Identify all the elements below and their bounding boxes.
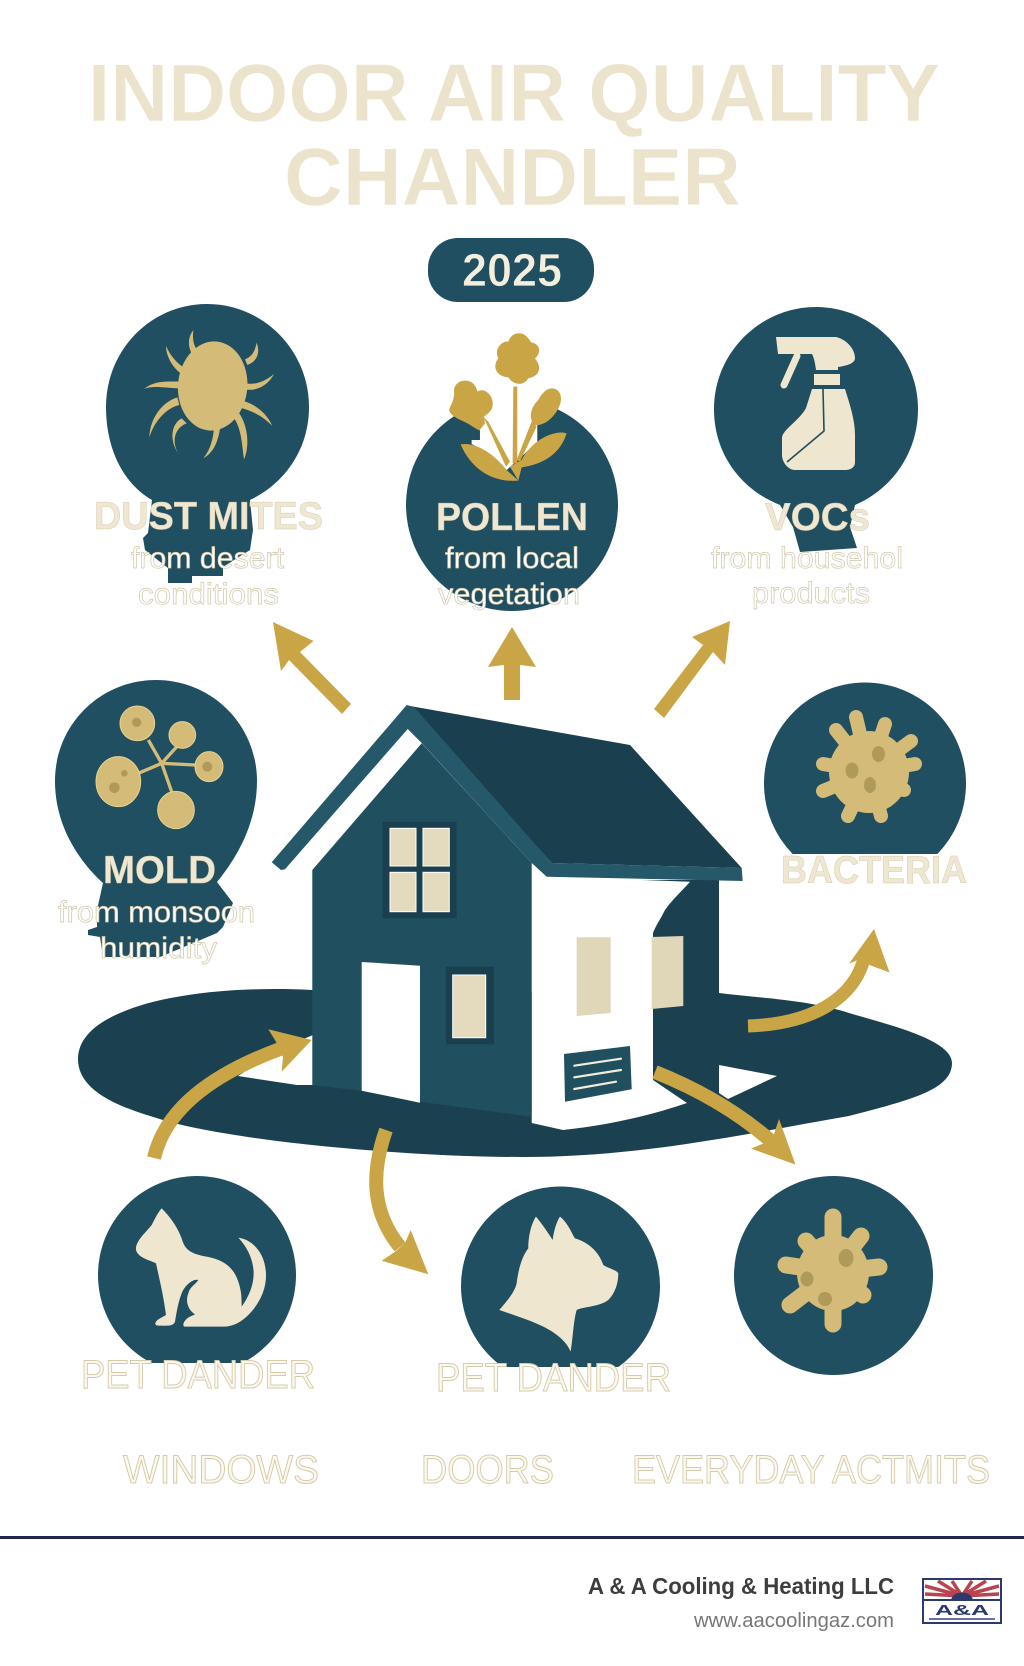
icon: mold spores bbox=[96, 706, 223, 829]
back wall bbox=[640, 880, 719, 1100]
arrow: to bacteria bbox=[748, 929, 890, 1026]
particle backdrop bbox=[734, 1176, 933, 1375]
pollen label: POLLEN bbox=[436, 496, 588, 539]
year badge: 2025 bbox=[462, 244, 562, 296]
arrow: windows air entering bbox=[154, 1029, 312, 1158]
front wall bbox=[312, 743, 532, 1117]
mold source: from monsoon bbox=[58, 896, 255, 929]
panel: bacteria bbox=[764, 682, 967, 892]
ground shadow bbox=[78, 989, 952, 1157]
dust mites source: conditions bbox=[138, 578, 279, 611]
icon: flowers bbox=[449, 333, 567, 481]
title: INDOOR AIR QUALITY bbox=[88, 48, 940, 139]
dust mites source bbox=[131, 542, 285, 611]
bacteria label: BACTERIA bbox=[781, 849, 967, 892]
panel: mold bbox=[55, 680, 257, 965]
panel: pet dander dog bbox=[436, 1186, 671, 1400]
arrow: doors air entering bbox=[376, 1130, 428, 1274]
ground notches bbox=[238, 1035, 777, 1099]
year badge bbox=[428, 238, 594, 302]
icon: company logo: A&A bbox=[935, 1602, 989, 1619]
roof bbox=[410, 706, 742, 868]
lower window bbox=[446, 967, 494, 1044]
pet dander label: PET DANDER bbox=[436, 1356, 671, 1400]
label: everyday activities: EVERYDAY ACTMITS bbox=[632, 1448, 990, 1492]
mold label: MOLD bbox=[103, 849, 216, 892]
footer website: www.aacoolingaz.com bbox=[693, 1610, 894, 1632]
dust mites label: DUST MITES bbox=[94, 495, 323, 538]
pollen source: vegetation bbox=[438, 578, 580, 611]
pollen source bbox=[438, 542, 580, 611]
panel: dust mites bbox=[94, 304, 323, 611]
house on ground bbox=[78, 705, 952, 1157]
title bbox=[88, 48, 940, 223]
VOCs source: from househol bbox=[711, 542, 903, 575]
panel: pet dander cat bbox=[81, 1176, 315, 1397]
footer company name: A & A Cooling & Heating LLC bbox=[588, 1573, 894, 1599]
dust mites source: from desert bbox=[131, 542, 285, 575]
dust mites backdrop bbox=[106, 304, 309, 583]
title: CHANDLER bbox=[284, 132, 741, 223]
side windows bbox=[577, 936, 683, 1016]
panel: everyday particle bbox=[734, 1176, 933, 1375]
roof edge bbox=[272, 705, 743, 881]
arrow: to dust mites bbox=[273, 622, 351, 714]
vent bbox=[564, 1046, 632, 1102]
VOCs source bbox=[711, 542, 903, 610]
icon: cat bbox=[136, 1208, 266, 1327]
icon: dust mite bbox=[144, 330, 274, 459]
label: doors: DOORS bbox=[421, 1448, 554, 1492]
mold source: humidity bbox=[100, 932, 217, 965]
side wall bbox=[532, 863, 690, 1130]
dog backdrop bbox=[461, 1186, 660, 1386]
icon: dog bbox=[499, 1217, 618, 1352]
pollen backdrop bbox=[406, 399, 618, 611]
icon: spray bottle bbox=[776, 337, 855, 470]
pollen source: from local bbox=[445, 542, 579, 575]
label: windows: WINDOWS bbox=[123, 1448, 319, 1492]
VOCs label: VOCs bbox=[765, 496, 870, 539]
cat backdrop bbox=[98, 1176, 296, 1374]
upper window bbox=[383, 822, 457, 918]
icon: company logo bbox=[923, 1579, 1001, 1623]
door bbox=[362, 962, 420, 1103]
footer rule bbox=[0, 1536, 1024, 1539]
panel: VOCs bbox=[711, 307, 918, 610]
VOCs backdrop bbox=[714, 307, 918, 552]
icon: bacteria bbox=[823, 717, 915, 816]
arrow: to pollen bbox=[488, 627, 536, 700]
panel: pollen bbox=[406, 333, 618, 611]
VOCs source: products bbox=[752, 577, 870, 610]
mold backdrop bbox=[55, 680, 257, 957]
pet dander label: PET DANDER bbox=[81, 1353, 315, 1397]
arrow: everyday activities bbox=[655, 1072, 796, 1165]
bacteria backdrop bbox=[764, 682, 966, 854]
icon: particle bbox=[786, 1217, 879, 1324]
mold source bbox=[58, 896, 255, 965]
arrow: to VOCs bbox=[654, 621, 730, 718]
